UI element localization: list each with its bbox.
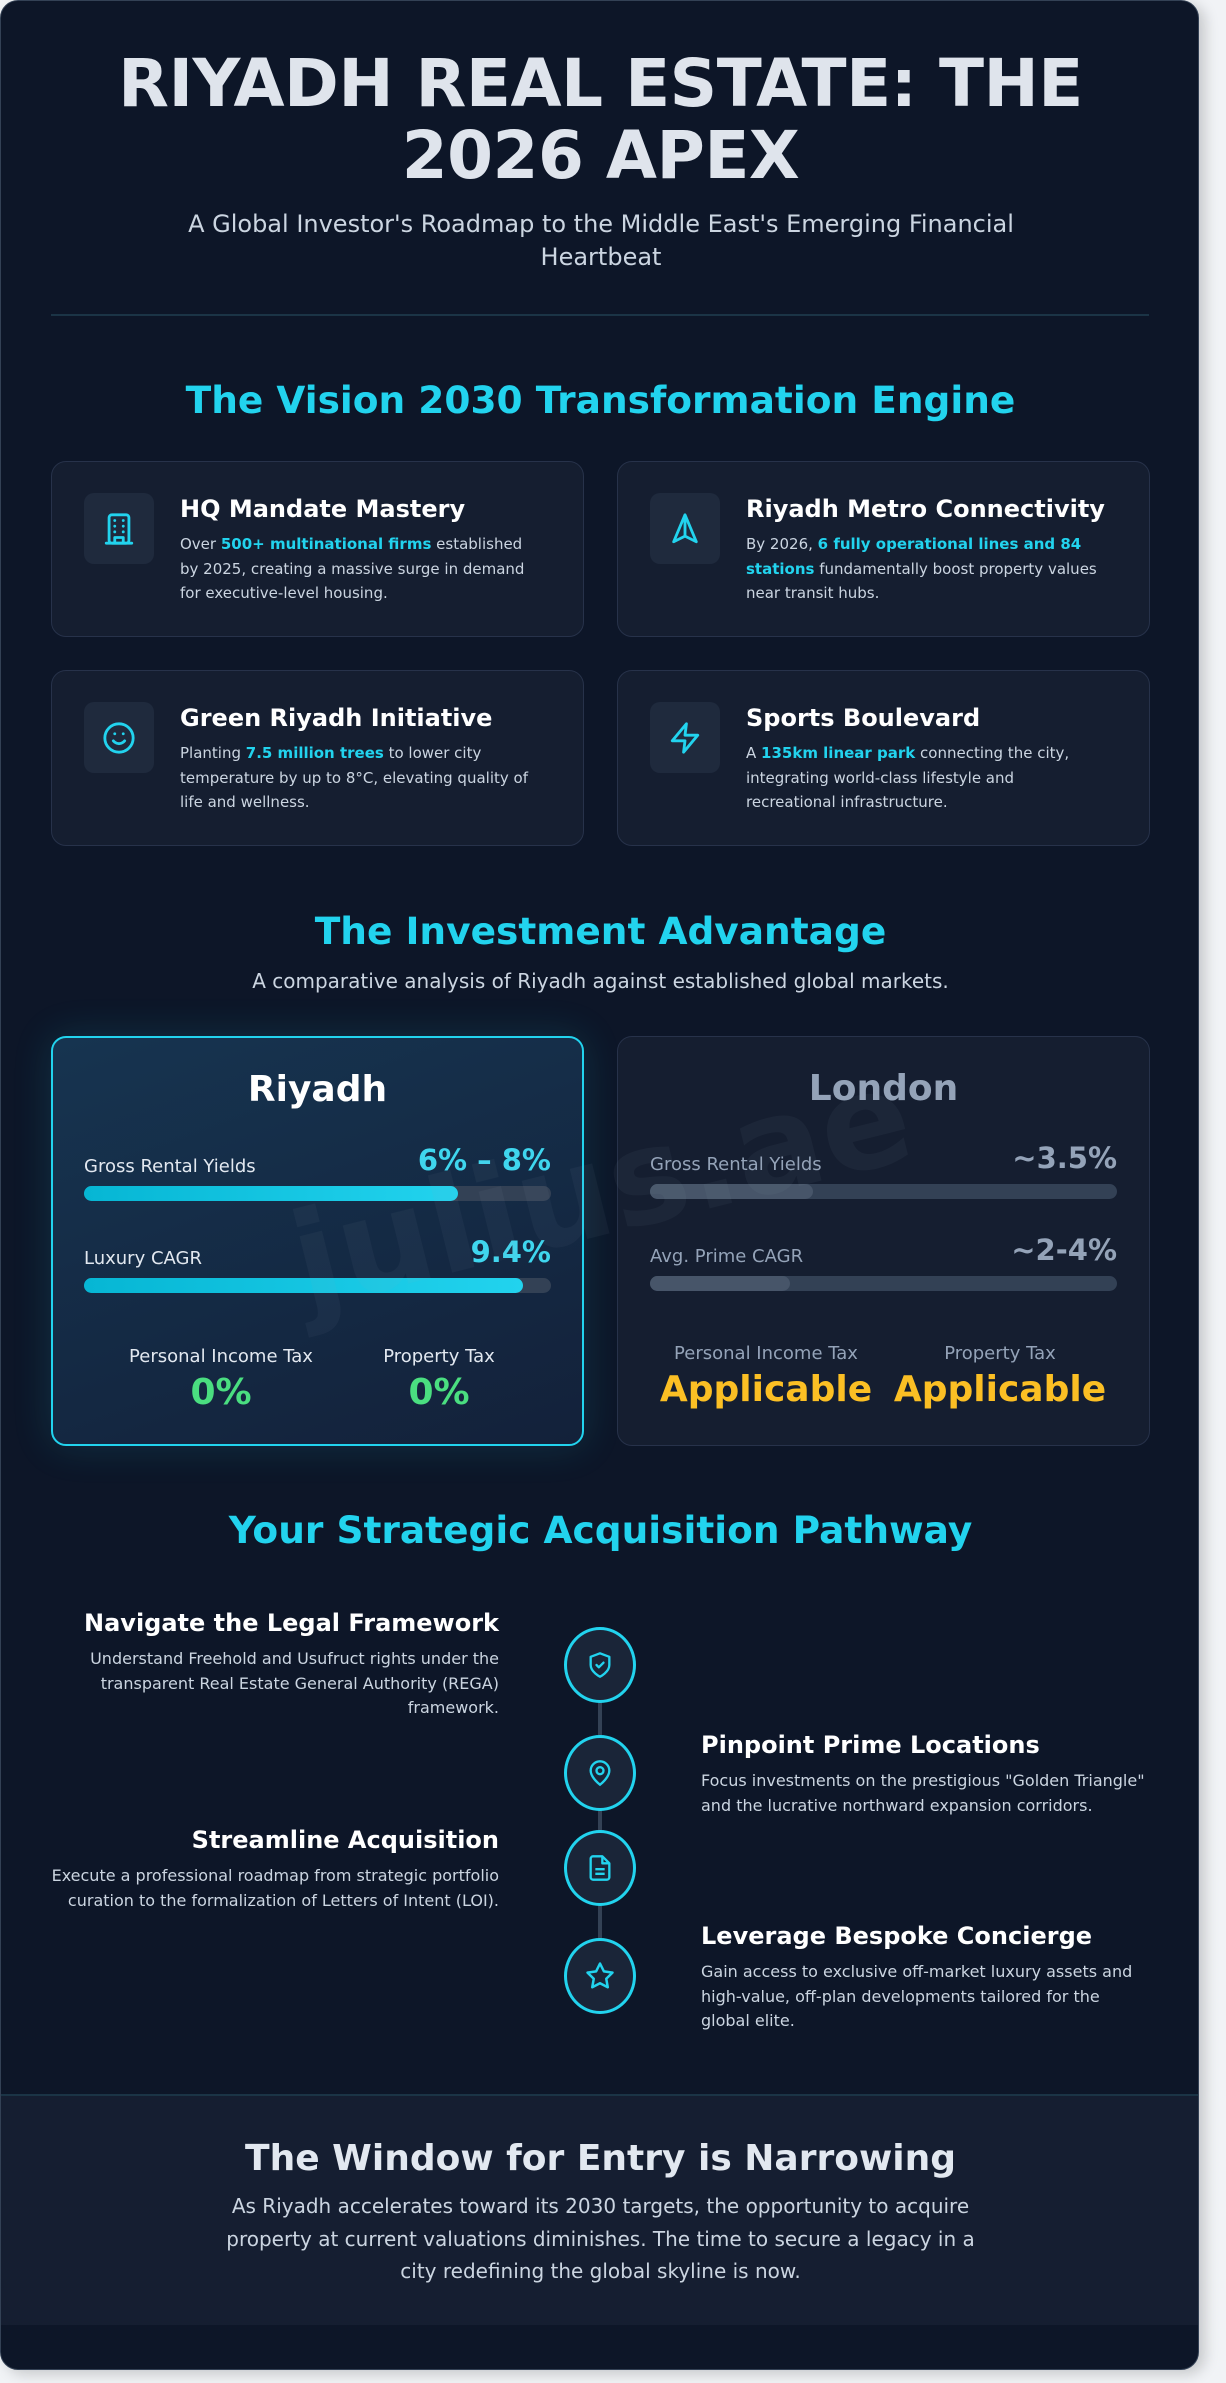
watermark: julius.ae: [277, 1038, 926, 1340]
tax: income: 0%: [190, 1372, 252, 1413]
card text: A 135km linear park connecting the city, integrating world-class lifestyle and recreational infrastructure.: [746, 744, 1069, 811]
metric: luxury CAGR: [84, 1235, 551, 1293]
tax: income: Personal Income Tax: [129, 1346, 313, 1367]
icon: lightning: [650, 702, 720, 773]
card title: Sports Boulevard: [746, 704, 980, 732]
step 4 text: Leverage Bespoke Concierge: [701, 1922, 1092, 1950]
CTA text: As Riyadh accelerates toward its 2030 targets, the opportunity to acquire property at current valuations diminishes. The time to secure a legacy in a city redefining the global skyline is now.: [226, 2194, 975, 2283]
step 3 text: [52, 1826, 499, 1910]
title: RIYADH REAL ESTATE: THE: [118, 45, 1083, 122]
icon: smile: [84, 702, 154, 773]
card text: By 2026, 6 fully operational lines and 84 stations fundamentally boost property values near transit hubs.: [746, 535, 1097, 602]
step 1 text: [84, 1609, 500, 1717]
panel: Riyadh: [51, 1036, 584, 1446]
heading: vision 2030: The Vision 2030 Transformation Engine: [186, 378, 1015, 422]
card: Green Riyadh: [51, 670, 584, 846]
card: Sports Boulevard: [617, 670, 1150, 846]
step 2 text: Focus investments on the prestigious "Golden Triangle" and the lucrative northward expansion corridors.: [701, 1771, 1145, 1814]
step 1 icon: shield: [564, 1627, 636, 1703]
metric: prime CAGR: [650, 1233, 1117, 1291]
metric: rental yields: ~3.5%: [1012, 1141, 1117, 1175]
tax: property: Applicable: [894, 1369, 1106, 1410]
card text: Planting 7.5 million trees to lower city temperature by up to 8°C, elevating quality of life and wellness.: [180, 744, 528, 811]
CTA panel: [1, 2094, 1200, 2325]
section subtitle: A comparative analysis of Riyadh against established global markets.: [252, 969, 949, 993]
heading: pathway: Your Strategic Acquisition Pathway: [229, 1508, 972, 1552]
CTA heading: The Window for Entry is Narrowing: [245, 2138, 956, 2179]
step 3 icon: document: [564, 1830, 636, 1906]
tax: property: 0%: [408, 1372, 470, 1413]
card title: Green Riyadh Initiative: [180, 704, 492, 732]
metric: rental yields: [650, 1141, 1117, 1199]
title: [118, 45, 1083, 194]
step 4 icon: star: [564, 1938, 636, 2014]
step 2 text: Pinpoint Prime Locations: [701, 1731, 1040, 1759]
tax: income: [129, 1346, 313, 1413]
card text: Over 500+ multinational firms established by 2025, creating a massive surge in demand for executive-level housing.: [180, 535, 524, 602]
metric: rental yields: Gross Rental Yields: [650, 1154, 822, 1175]
card: HQ Mandate: [51, 461, 584, 637]
tax: income: Applicable: [660, 1369, 872, 1410]
tax: property: [894, 1343, 1106, 1410]
step 3 text: Streamline Acquisition: [192, 1826, 499, 1854]
heading: investment advantage: The Investment Advantage: [315, 909, 886, 953]
metric: rental yields: 6% – 8%: [418, 1143, 551, 1177]
subtitle: A Global Investor's Roadmap to the Middle East's Emerging Financial Heartbeat: [188, 210, 1014, 271]
tax: income: Personal Income Tax: [674, 1343, 858, 1364]
step 4 text: [701, 1922, 1132, 2030]
tax: property: Property Tax: [944, 1343, 1056, 1364]
step 4 text: Gain access to exclusive off-market luxury assets and high-value, off-plan developments tailored for the global elite.: [701, 1962, 1132, 2030]
metric: prime CAGR: ~2-4%: [1011, 1233, 1117, 1267]
metric: prime CAGR: Avg. Prime CAGR: [650, 1246, 803, 1267]
card title: Riyadh Metro Connectivity: [746, 495, 1105, 523]
card: Metro: [617, 461, 1150, 637]
title: 2026 APEX: [402, 117, 799, 194]
step 1 text: Understand Freehold and Usufruct rights under the transparent Real Estate General Authority (REGA) framework.: [90, 1649, 499, 1717]
step 3 text: Execute a professional roadmap from strategic portfolio curation to the formalization of Letters of Intent (LOI).: [52, 1866, 499, 1910]
tax: income: [660, 1343, 872, 1410]
metric: rental yields: Gross Rental Yields: [84, 1156, 256, 1177]
card title: HQ Mandate Mastery: [180, 495, 465, 523]
step 1 text: Navigate the Legal Framework: [84, 1609, 499, 1637]
icon: building: [84, 493, 154, 564]
metric: luxury CAGR: Luxury CAGR: [84, 1248, 202, 1269]
metric: luxury CAGR: 9.4%: [471, 1235, 551, 1269]
panel title: London: [809, 1068, 958, 1109]
tax: property: Property Tax: [383, 1346, 495, 1367]
tax: property: [383, 1346, 495, 1413]
metric: rental yields: [84, 1143, 551, 1201]
step 2 text: [701, 1731, 1145, 1814]
step 2 icon: pin: [564, 1735, 636, 1811]
icon: navigation: [650, 493, 720, 564]
panel: London: [617, 1036, 1150, 1446]
panel title: Riyadh: [248, 1069, 387, 1110]
